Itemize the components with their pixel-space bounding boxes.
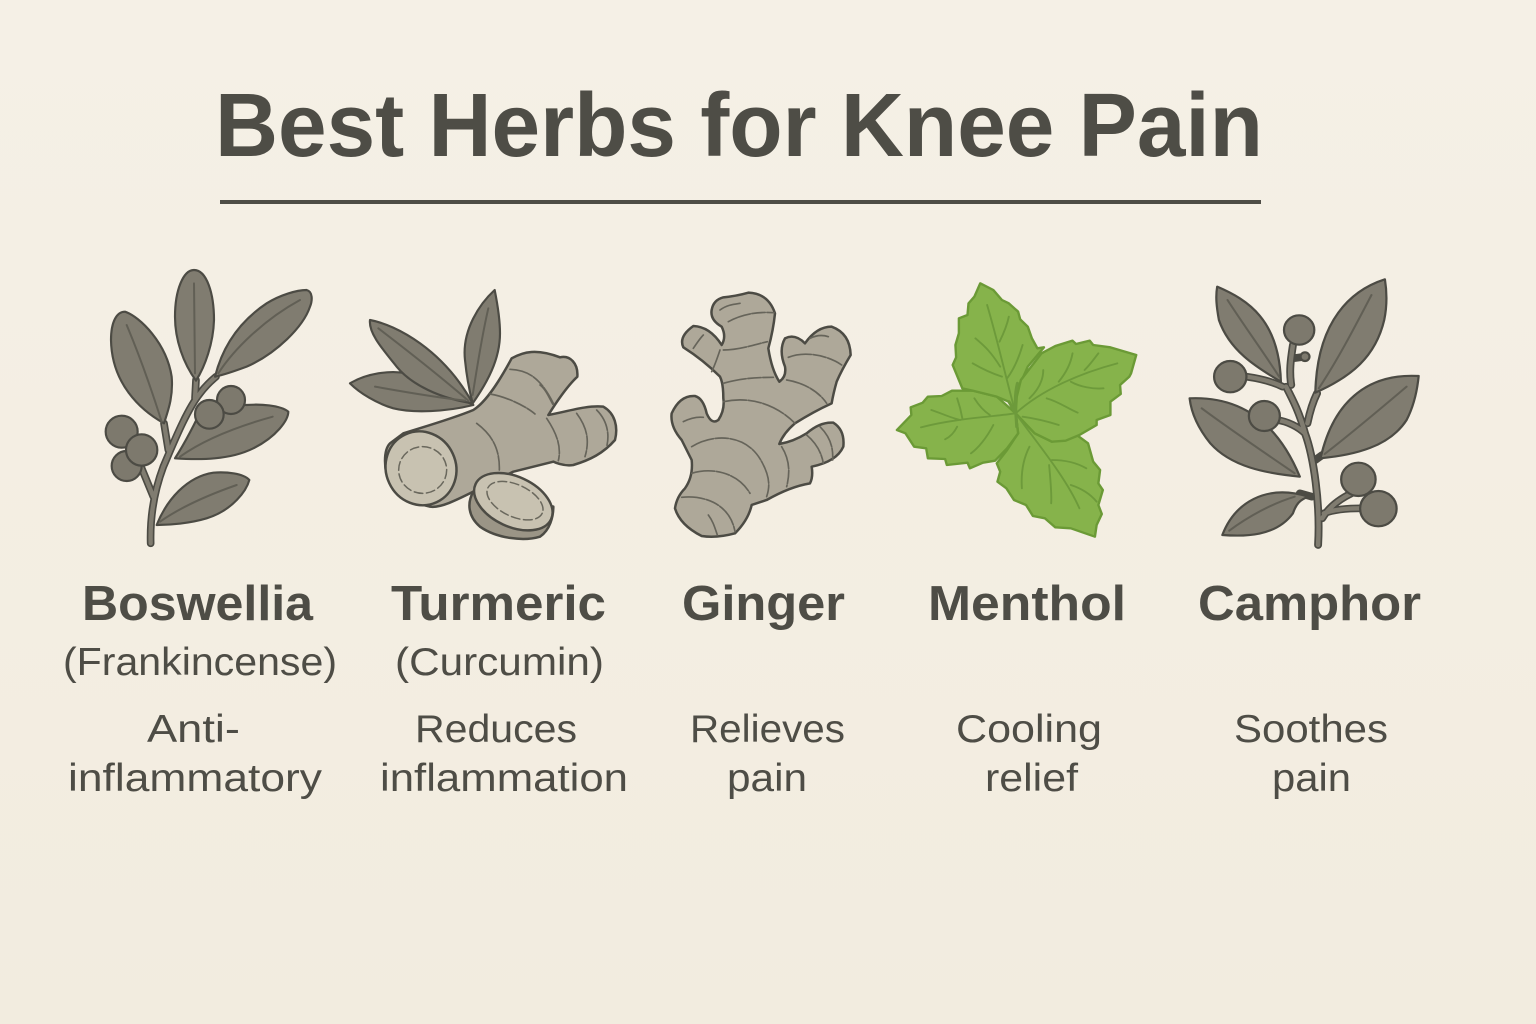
benefit: Cooling relief: Cooling bbox=[956, 708, 1102, 751]
name: Boswellia: Boswellia bbox=[82, 577, 314, 631]
benefit: Reduces inflammation: inflammation bbox=[380, 757, 628, 800]
benefit: Relieves pain bbox=[690, 708, 845, 800]
benefit: Relieves pain: Relieves bbox=[690, 708, 845, 751]
panel: Camphor bbox=[1190, 279, 1421, 800]
benefit: Cooling relief bbox=[956, 708, 1102, 800]
benefit: Anti-inflammatory: Anti- bbox=[147, 708, 240, 751]
name: Menthol: Menthol bbox=[928, 577, 1126, 631]
benefit: Reduces inflammation: Reduces bbox=[415, 708, 577, 751]
icon: mint leaves bbox=[897, 283, 1136, 537]
title: Best Herbs for Knee Pain bbox=[215, 76, 1263, 176]
benefit: Soothes pain bbox=[1234, 708, 1388, 800]
icon: boswellia sprig bbox=[106, 270, 312, 543]
icon: ginger root bbox=[671, 293, 851, 537]
subtitle: Curcumin: (Curcumin) bbox=[395, 641, 604, 684]
icon: turmeric root with leaves bbox=[350, 290, 616, 542]
name: Turmeric: Turmeric bbox=[391, 577, 606, 631]
benefit: Anti-inflammatory: inflammatory bbox=[68, 757, 323, 800]
benefit: Relieves pain: pain bbox=[727, 757, 807, 800]
icon: camphor sprig bbox=[1190, 279, 1419, 545]
panel: Ginger bbox=[671, 293, 851, 800]
benefit: Anti-inflammatory bbox=[68, 708, 323, 800]
subtitle: Frankincense: (Frankincense) bbox=[63, 641, 337, 684]
panel: Turmeric bbox=[350, 290, 628, 800]
name: Camphor: Camphor bbox=[1198, 577, 1421, 631]
name: Ginger: Ginger bbox=[682, 577, 845, 631]
benefit: Soothes pain: pain bbox=[1272, 757, 1351, 800]
panel: Menthol bbox=[897, 283, 1136, 800]
benefit: Cooling relief: relief bbox=[985, 757, 1078, 800]
panel: Boswellia bbox=[63, 270, 337, 800]
benefit: Reduces inflammation bbox=[380, 708, 628, 800]
benefit: Soothes pain: Soothes bbox=[1234, 708, 1388, 751]
